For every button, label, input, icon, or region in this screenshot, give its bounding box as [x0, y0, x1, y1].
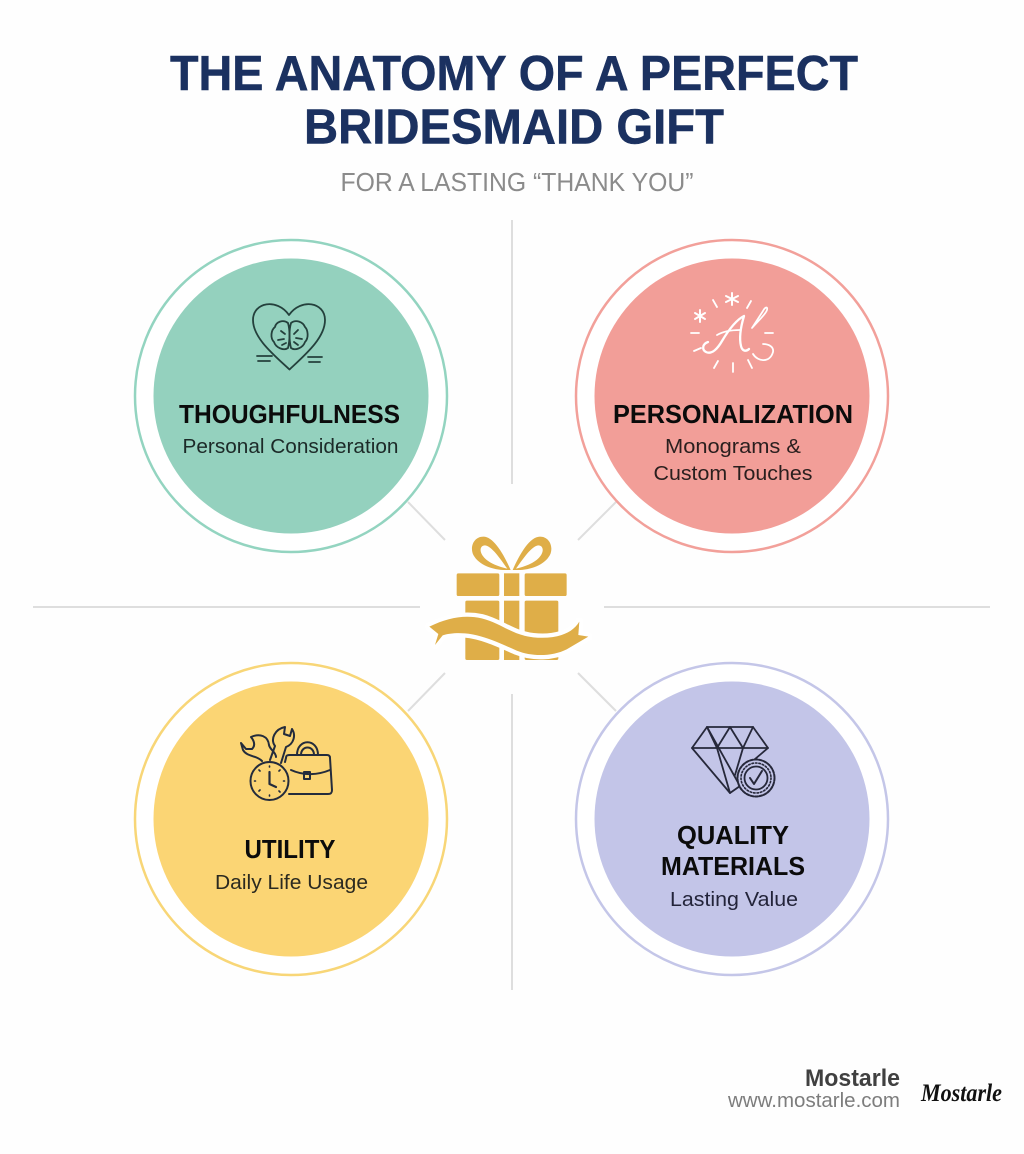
title: BRIDESMAID GIFT	[304, 100, 724, 154]
brand block	[727, 1065, 900, 1112]
icon: heart with brain	[253, 304, 325, 370]
heading: quality materials	[661, 820, 805, 881]
heading: utility: UTILITY	[244, 834, 336, 864]
panel: utility	[135, 663, 447, 975]
text: monograms and custom touches	[654, 435, 812, 485]
panel: thoughtfulness	[135, 240, 447, 552]
title	[170, 46, 858, 154]
text: personal consideration: Personal Consideration	[182, 435, 398, 458]
brand block: Mostarle	[805, 1065, 900, 1092]
logo: mostarle script: Mostarle	[920, 1080, 1002, 1107]
heading: quality materials: QUALITY	[677, 820, 789, 850]
text: monograms and custom touches: Monograms &	[665, 435, 801, 458]
subtitle: FOR A LASTING “THANK YOU”	[340, 167, 694, 197]
icon: diamond with seal	[692, 727, 774, 796]
panel: personalization	[576, 240, 888, 552]
icon: tools, clock and briefcase	[241, 727, 332, 800]
heading: quality materials: MATERIALS	[661, 851, 805, 881]
text: daily life usage: Daily Life Usage	[215, 871, 368, 894]
brand block: www.mostarle.com	[727, 1090, 900, 1112]
panel: quality materials	[576, 663, 888, 975]
heading: personalization: PERSONALIZATION	[613, 399, 853, 429]
text: monograms and custom touches: Custom Touches	[654, 462, 812, 485]
icon: gift box	[429, 537, 588, 660]
icon: monogram and needle	[691, 293, 773, 372]
text: lasting value: Lasting Value	[670, 888, 798, 911]
title: THE ANATOMY OF A PERFECT	[170, 46, 858, 101]
heading: thoughtfulness: THOUGHFULNESS	[179, 399, 400, 429]
